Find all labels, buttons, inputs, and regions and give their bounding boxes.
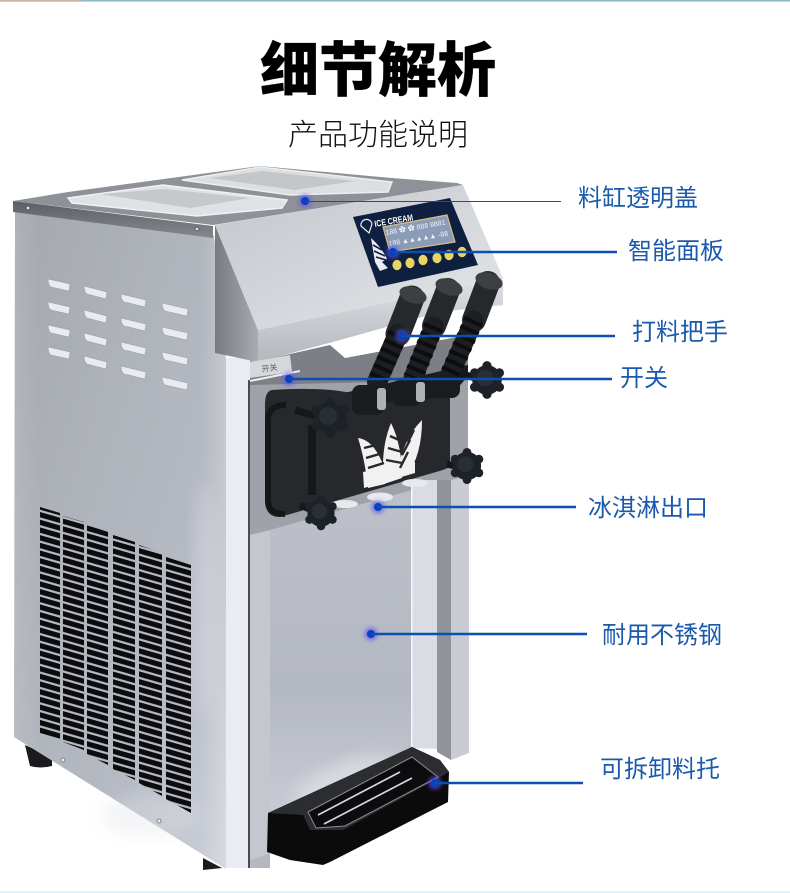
- side screws: [61, 758, 161, 823]
- panel buttons: [392, 247, 467, 270]
- subtitle: 产品功能说明: [288, 119, 468, 152]
- drip tray: [267, 747, 449, 865]
- lcd digits: 188 ▲▲▲▲▲ -88: [388, 231, 449, 248]
- left side panel: [14, 211, 226, 869]
- front steel base: [248, 360, 469, 868]
- lcd digits: [385, 219, 449, 248]
- callout: drip tray: [428, 756, 720, 790]
- callout: stainless steel: 耐用不锈钢: [602, 622, 722, 649]
- black dispensing head: [265, 365, 468, 517]
- lcd screen: [383, 215, 455, 252]
- callout: stainless steel: [364, 622, 722, 649]
- upper side vents: [48, 279, 188, 390]
- callout: handle: 打料把手: [632, 319, 728, 346]
- callout: drip tray: 可拆卸料托: [600, 756, 720, 783]
- title: 细节解析: [260, 38, 496, 104]
- callout: outlet: [372, 495, 708, 522]
- feet: [25, 745, 222, 870]
- callout: control panel: [386, 238, 724, 265]
- panel heading: ICE CREAM: [374, 212, 414, 229]
- top surface: [13, 166, 463, 225]
- callout: control panel: 智能面板: [628, 238, 724, 265]
- switch marking: 开关: [261, 362, 278, 374]
- callout: hopper lid: [298, 185, 698, 212]
- bottom edge band: [0, 891, 790, 893]
- front white column: [226, 358, 250, 868]
- cowling: [215, 185, 503, 385]
- cone icon: [361, 219, 388, 271]
- dispensing handles: [352, 269, 505, 415]
- callout: switch: [282, 365, 668, 392]
- top front strip with screws: [13, 201, 213, 238]
- lower side grille: [40, 507, 191, 813]
- star knobs: [295, 361, 504, 530]
- brand logo: [358, 420, 422, 488]
- callout: outlet: 冰淇淋出口: [588, 495, 708, 522]
- top edge band: [0, 0, 790, 2]
- ice cream machine: [13, 166, 505, 870]
- hopper lids: [68, 167, 392, 216]
- callout: hopper lid: 料缸透明盖: [578, 185, 698, 212]
- lcd digits: 188 ✿ ✿ 888 8881: [385, 219, 446, 237]
- callout: switch: 开关: [620, 365, 668, 392]
- callout: handle: [396, 319, 728, 346]
- control panel: [353, 198, 478, 287]
- outlet caps: [332, 479, 428, 508]
